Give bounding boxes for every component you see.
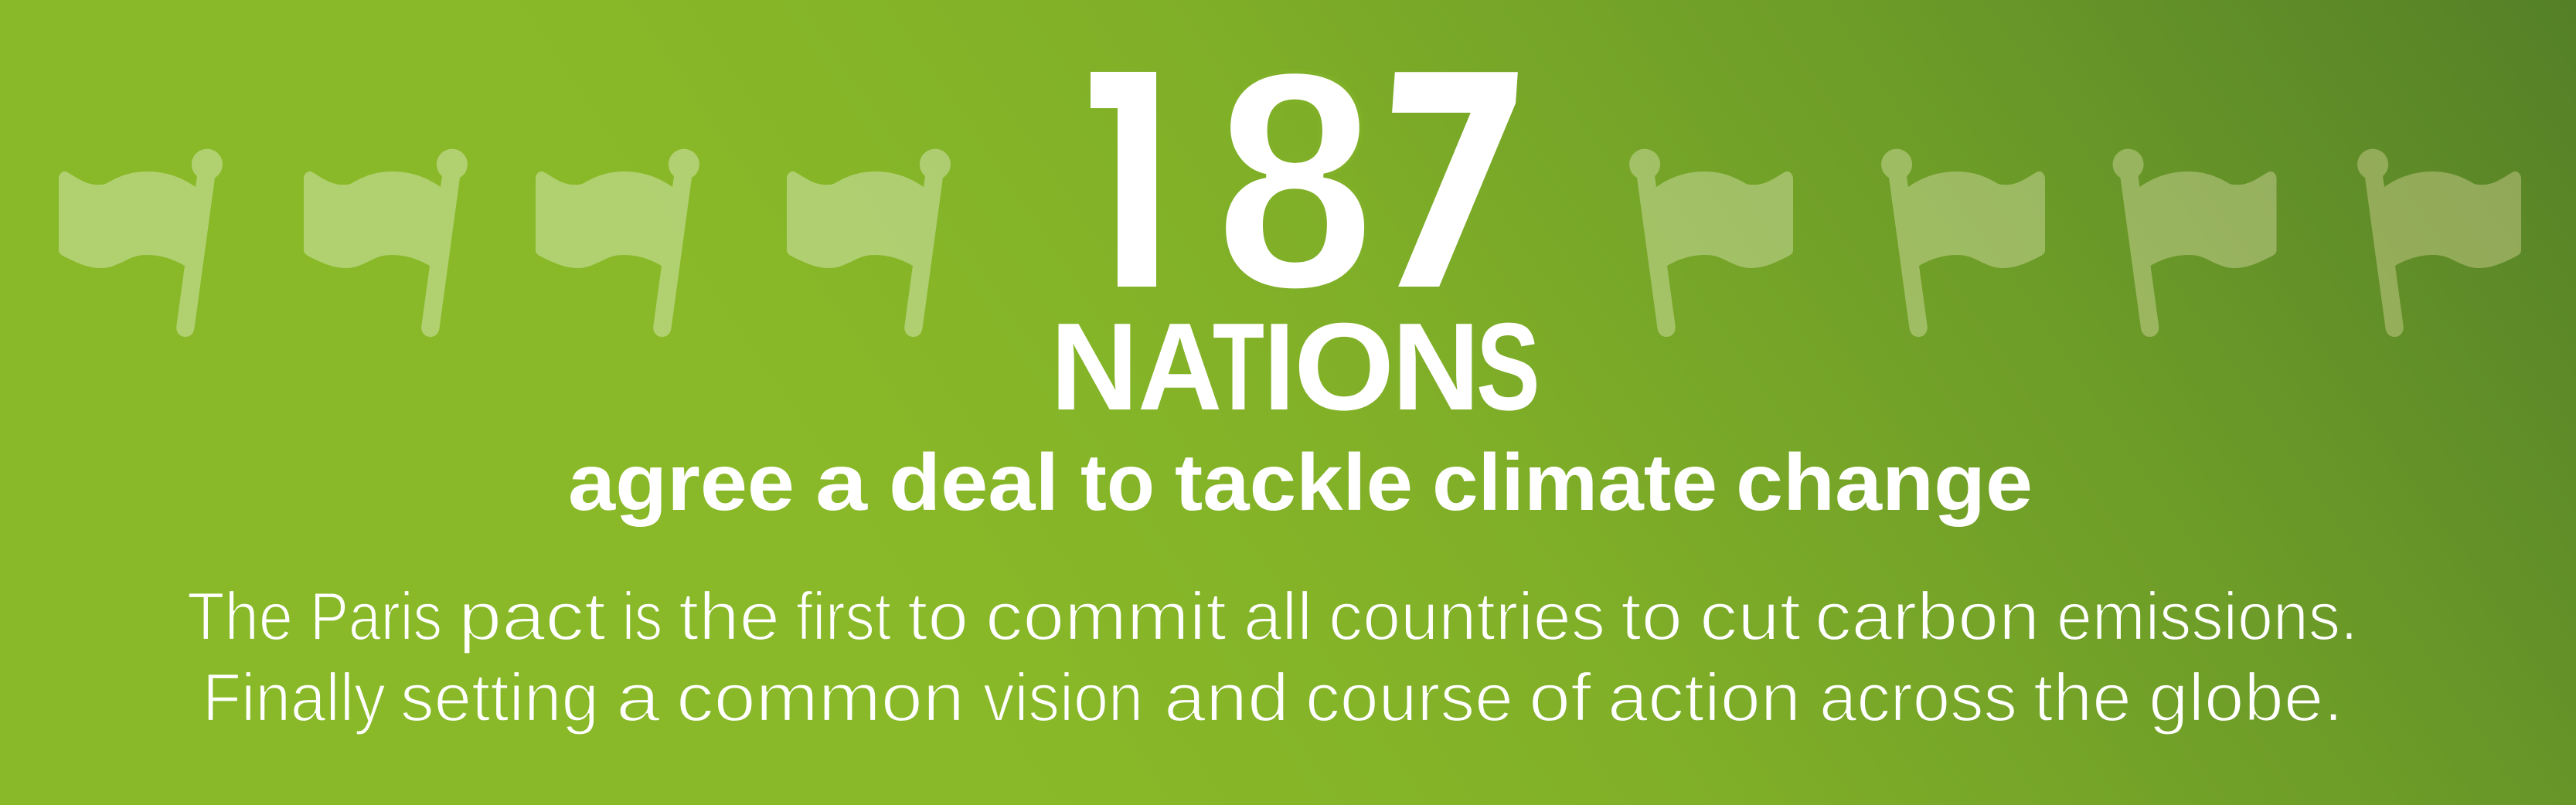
heading: NATIONS: N [1050, 297, 1138, 436]
heading: NATIONS: N [1392, 297, 1480, 436]
heading: NATIONS: I [1264, 297, 1295, 436]
body line 1 [187, 578, 2358, 654]
body line 1: to [907, 578, 968, 654]
icon: flag 5 [1629, 149, 1793, 337]
heading: NATIONS [1050, 297, 1540, 436]
body line 2: and [1164, 659, 1289, 735]
icon: flag 1 [59, 149, 223, 337]
subheading: deal [889, 438, 1059, 528]
icon: flag 3 [536, 149, 699, 337]
heading: NATIONS: O [1294, 297, 1394, 436]
body line 1: pact [458, 578, 606, 654]
heading: NATIONS: T [1213, 297, 1264, 436]
heading: NATIONS: A [1138, 298, 1222, 436]
subheading: a [815, 438, 868, 528]
body line 2: across [1819, 659, 2017, 735]
body line 1: Paris [310, 578, 442, 654]
icon: flag 2 [304, 149, 468, 337]
body line 2: a [616, 659, 660, 735]
big number 187 [1091, 72, 1518, 289]
body line 2: vision [983, 659, 1143, 735]
body line 2: globe. [2149, 659, 2343, 735]
body line 1: emissions. [2057, 578, 2358, 654]
body line 1: The [187, 578, 293, 654]
left flags row [59, 149, 951, 337]
icon: flag 7 [2113, 149, 2277, 337]
digit 1: 1 [1046, 10, 1216, 352]
digit 1 [1091, 72, 1156, 287]
body line 2: action [1608, 659, 1801, 735]
subheading [568, 438, 2033, 528]
subheading: to [1080, 438, 1155, 528]
heading: NATIONS: S [1476, 297, 1540, 436]
subheading: change [1736, 438, 2033, 528]
body text [187, 578, 2358, 735]
body line 1: countries [1329, 578, 1605, 654]
body line 1: carbon [1815, 578, 2040, 654]
body line 1: to [1621, 578, 1683, 654]
subheading: agree [568, 438, 795, 528]
body line 1: commit [985, 578, 1227, 654]
icon: flag 8 [2357, 149, 2521, 337]
body line 2: the [2033, 659, 2132, 735]
body line 2: common [676, 659, 965, 735]
icon: flag 4 [787, 149, 951, 337]
body line 1: cut [1700, 578, 1801, 654]
digit 7: 7 [1360, 13, 1540, 356]
body line 2: setting [400, 659, 599, 735]
subheading: climate [1432, 438, 1717, 528]
digit 8: 8 [1215, 8, 1375, 353]
body line 1: all [1244, 578, 1312, 654]
right flags row [1629, 149, 2521, 337]
body line 2: course [1305, 659, 1513, 735]
body line 2: of [1529, 659, 1592, 735]
subheading: tackle [1175, 438, 1413, 528]
icon: flag 6 [1881, 149, 2045, 337]
body line 1: first [796, 578, 891, 654]
body line 1: is [622, 578, 662, 654]
body line 2 [202, 659, 2343, 735]
body line 2: Finally [202, 659, 386, 735]
body line 1: the [679, 578, 780, 654]
